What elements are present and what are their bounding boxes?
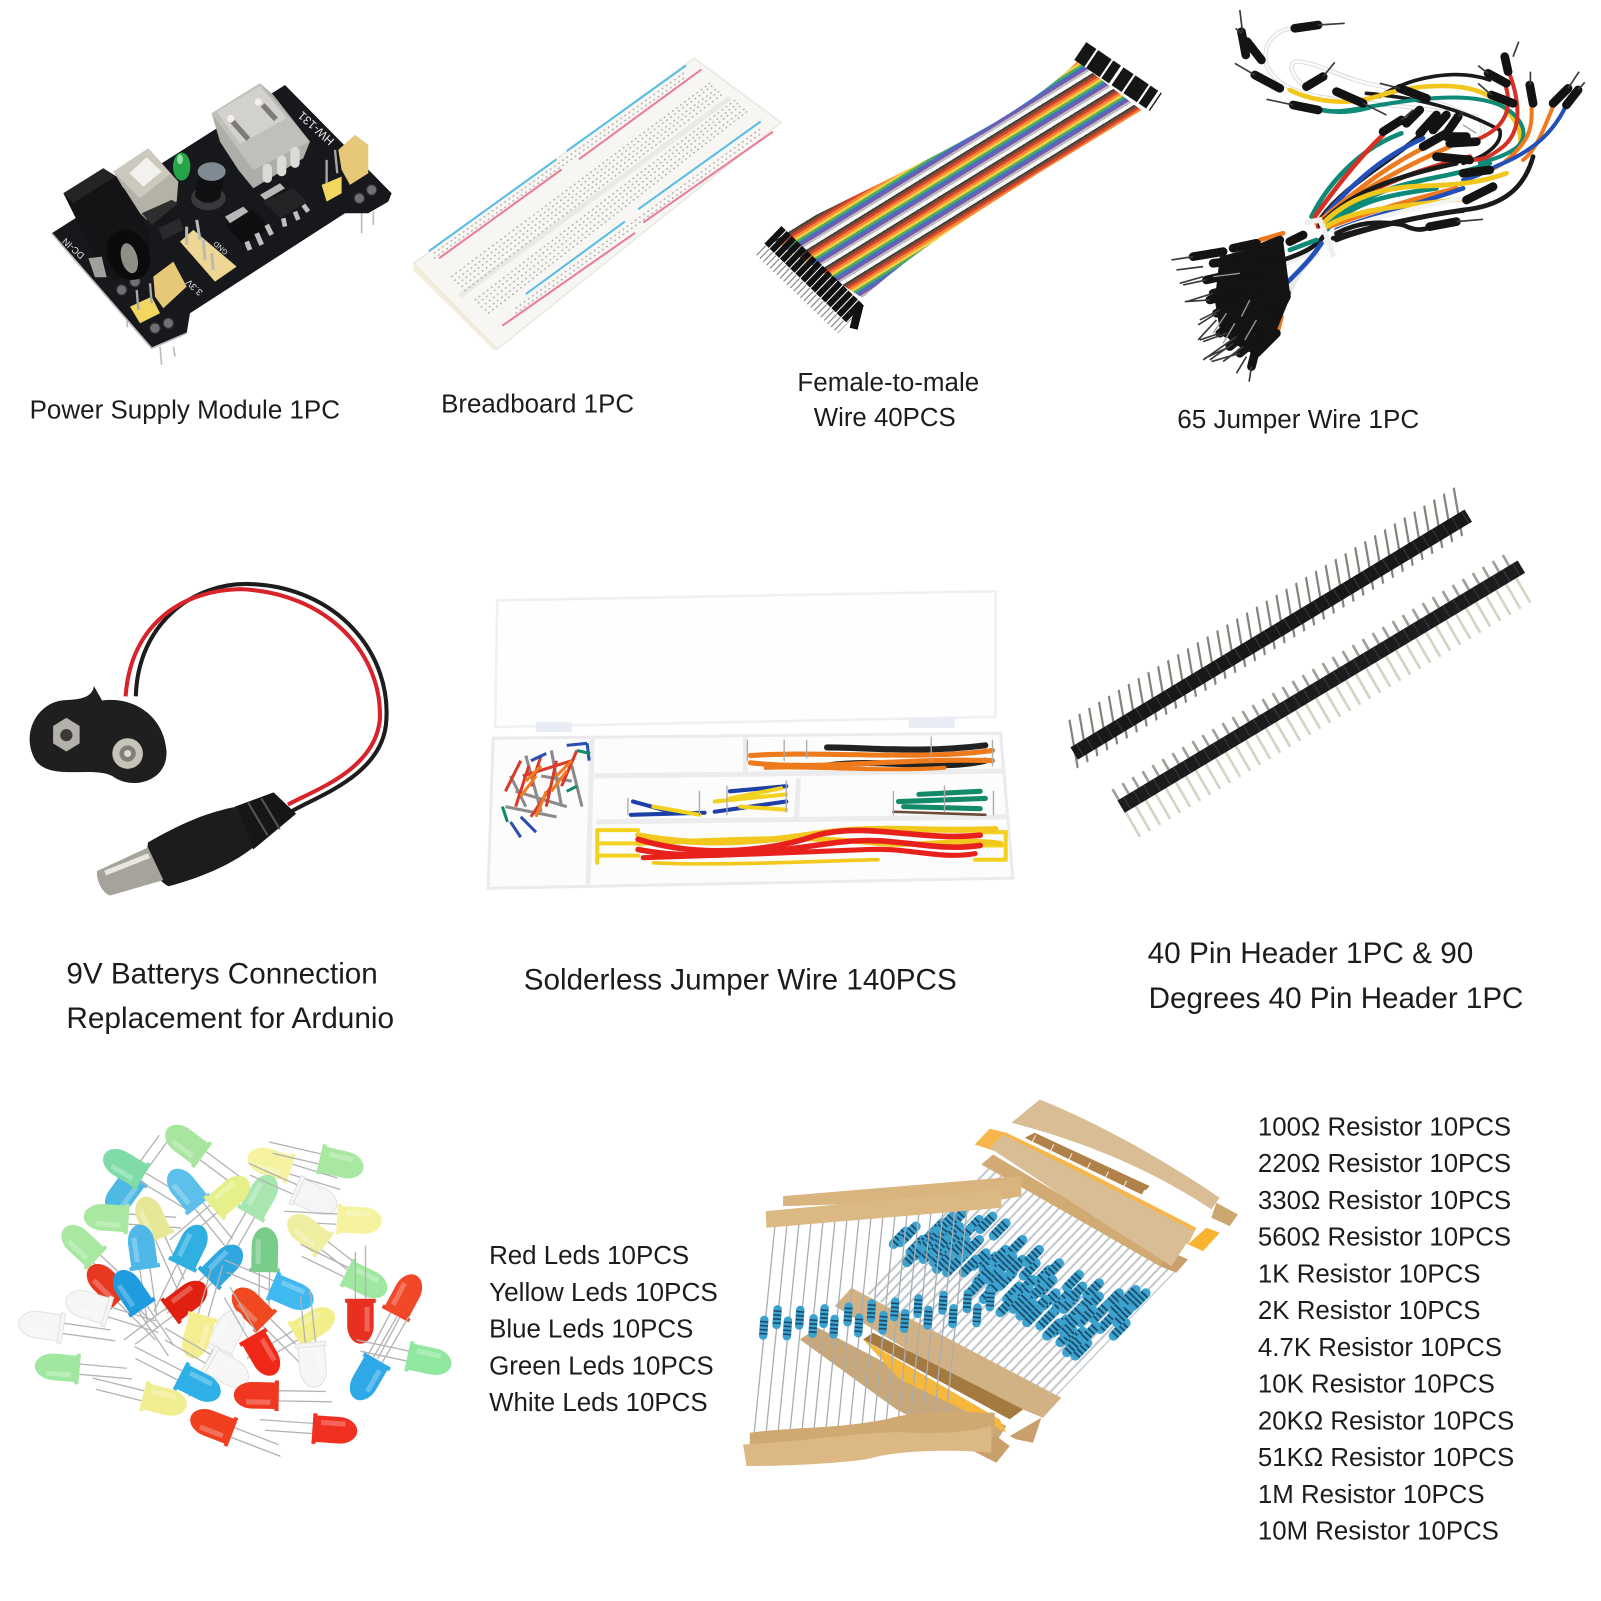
battery snap — [30, 686, 167, 783]
plug ribs — [248, 798, 280, 835]
left yellow jumper — [130, 262, 187, 323]
orange tape — [975, 1129, 1196, 1244]
resistor list: 560Ω Resistor 10PCS — [1258, 1222, 1511, 1252]
compartment dividers — [588, 737, 1009, 884]
top connectors — [1080, 51, 1156, 102]
box lid — [495, 591, 996, 727]
coloured wires — [1260, 70, 1566, 330]
label: 9V battery connector: 9V Batterys Connection — [66, 957, 378, 990]
label: 65 jumper wire: 65 Jumper Wire 1PC — [1177, 406, 1419, 434]
plug body — [147, 807, 253, 886]
resistor list: 10M Resistor 10PCS — [1258, 1516, 1499, 1546]
right-angle header short pins — [1114, 555, 1515, 795]
resistor list — [1258, 1111, 1514, 1546]
left front tape — [766, 1189, 1001, 1228]
orange and black wires — [747, 737, 992, 769]
LED list: Blue Leds 10PCS — [489, 1314, 693, 1344]
label: breadboard: Breadboard 1PC — [441, 391, 634, 419]
resistor list: 4.7K Resistor 10PCS — [1258, 1332, 1502, 1362]
label: pin headers — [1148, 937, 1523, 1015]
board body — [414, 58, 781, 349]
capacitor — [191, 162, 226, 210]
vertical wires — [764, 1311, 961, 1328]
panel: 9V battery connector — [30, 584, 387, 895]
solder pads — [116, 185, 377, 334]
green LED — [173, 153, 190, 181]
tan tail under front tape — [1160, 1253, 1188, 1273]
board label GND: GND — [212, 239, 230, 257]
board edge — [52, 233, 187, 348]
red wire — [126, 589, 380, 805]
panel: solderless jumper wire box — [488, 591, 1013, 888]
LED list — [489, 1240, 718, 1417]
straight header body — [1074, 516, 1468, 754]
LED list: White Leds 10PCS — [489, 1387, 708, 1417]
connectors — [1193, 25, 1578, 367]
lower tails — [973, 1418, 1041, 1463]
label: pin headers: Degrees 40 Pin Header 1PC — [1149, 982, 1523, 1015]
tail pin — [854, 304, 860, 329]
barrel highlight — [105, 856, 149, 873]
light pin tips — [1213, 125, 1476, 343]
board side edge — [414, 263, 497, 350]
label: solderless jumper wire: Solderless Jumper Wire 140PCS — [524, 963, 957, 996]
white wire ticks — [1033, 1139, 1143, 1194]
left back tape — [783, 1176, 1021, 1206]
plug barrel — [97, 847, 163, 895]
bottom connectors — [773, 235, 856, 314]
lower black mass — [1215, 240, 1290, 353]
small chip — [158, 218, 183, 240]
resistor list: 10K Resistor 10PCS — [1258, 1369, 1495, 1399]
right regulator — [260, 183, 308, 227]
centre yellow header — [180, 220, 237, 282]
DC jack — [63, 168, 158, 287]
resistor list: 220Ω Resistor 10PCS — [1258, 1148, 1511, 1178]
board label 3.3V: 3.3V — [183, 277, 205, 298]
push switch — [113, 148, 178, 225]
hex terminal — [53, 718, 80, 751]
clustered resistors — [887, 1206, 1153, 1362]
board pins — [127, 212, 373, 365]
label: female-to-male wire: Female-to-male — [797, 369, 979, 397]
lower diagonal back band — [835, 1288, 1061, 1418]
label: 9V battery connector: Replacement for Ardunio — [66, 1002, 394, 1035]
blue and yellow wires — [628, 781, 786, 815]
resistor list: 1K Resistor 10PCS — [1258, 1258, 1481, 1288]
blue rail lines — [429, 65, 761, 294]
right tape tail — [1211, 1203, 1238, 1226]
LED list: Yellow Leds 10PCS — [489, 1277, 718, 1307]
board label DC-IN: DC-IN — [60, 236, 86, 261]
straight header pins — [1073, 507, 1467, 744]
black wire — [136, 584, 387, 812]
left regulator — [225, 207, 272, 250]
resistor list: 20KΩ Resistor 10PCS — [1258, 1405, 1514, 1435]
white wires — [1265, 28, 1483, 137]
resistor list: 2K Resistor 10PCS — [1258, 1295, 1481, 1325]
label: pin headers: 40 Pin Header 1PC & 90 — [1148, 937, 1473, 970]
resistor list: 1M Resistor 10PCS — [1258, 1479, 1485, 1509]
label: female-to-male wire — [797, 369, 979, 432]
plug strain relief — [235, 792, 296, 850]
front row resistors — [759, 1287, 995, 1341]
small mixed jumpers — [502, 743, 590, 837]
resistor list: 51KΩ Resistor 10PCS — [1258, 1442, 1514, 1472]
green wires — [893, 786, 993, 815]
brown gap lower — [863, 1333, 1023, 1419]
panel: 65 jumper wire — [1171, 10, 1585, 382]
orange tail — [1188, 1228, 1220, 1251]
hole rows — [434, 71, 761, 313]
label: power supply module: Power Supply Module 1PC — [30, 397, 340, 425]
under strip behind upper tape — [981, 1154, 1170, 1266]
label: female-to-male wire: Wire 40PCS — [814, 404, 956, 432]
right-angle header body — [1121, 567, 1521, 807]
centre groove — [459, 98, 730, 296]
panel: pin headers — [1073, 507, 1525, 814]
LED list: Green Leds 10PCS — [489, 1350, 714, 1380]
brown gap — [1025, 1133, 1150, 1194]
top back tape — [1011, 1099, 1220, 1209]
rainbow ribbon — [773, 61, 1142, 298]
panel: female-to-male wire — [761, 51, 1156, 329]
resistor list: 100Ω Resistor 10PCS — [1258, 1111, 1511, 1141]
right yellow jumper — [322, 135, 368, 202]
orange lower — [863, 1339, 1006, 1433]
straight header segments — [1074, 516, 1468, 754]
lower diagonal front band — [800, 1328, 1006, 1458]
diagonal wires — [932, 1227, 1112, 1338]
bottom pins — [761, 250, 842, 329]
red and yellow wires — [597, 829, 1006, 864]
bottom back tape — [750, 1412, 995, 1446]
resistor list: 330Ω Resistor 10PCS — [1258, 1185, 1511, 1215]
box base — [488, 733, 1013, 888]
label: 9V battery connector — [66, 957, 394, 1035]
round terminal — [112, 738, 143, 769]
right-angle header long pins — [1125, 574, 1525, 814]
panel: LED assortment — [17, 1117, 455, 1466]
USB socket — [212, 83, 310, 188]
hinges — [536, 723, 955, 727]
pins — [1171, 10, 1585, 382]
bottom front tape — [743, 1426, 991, 1466]
circuit board — [52, 85, 392, 348]
red rail lines — [439, 69, 773, 326]
panel: resistor assortment — [743, 1099, 1238, 1466]
right-angle header segments — [1121, 567, 1521, 807]
upper front tape — [990, 1134, 1195, 1266]
panel: breadboard — [414, 58, 781, 350]
LED list: Red Leds 10PCS — [489, 1240, 689, 1270]
cable tie — [1305, 220, 1334, 257]
board label HW-131: HW-131 — [295, 108, 337, 148]
panel: power supply module — [52, 83, 392, 365]
